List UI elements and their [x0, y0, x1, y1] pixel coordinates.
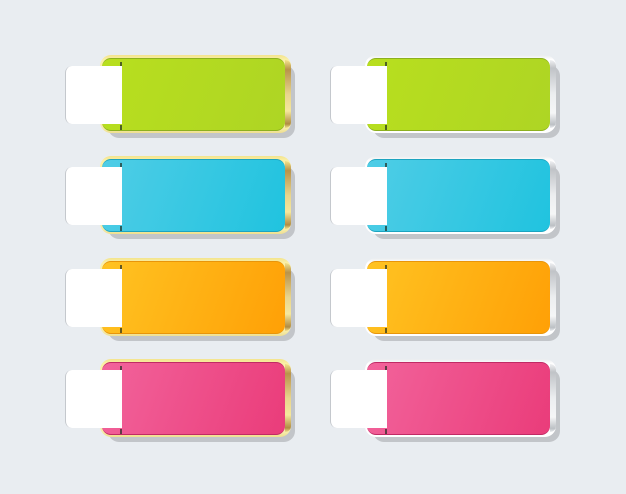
panel: blue label — [367, 159, 550, 232]
card: orange silver-framed, row 3 right — [330, 260, 560, 341]
panel: green label — [367, 58, 550, 130]
card: green silver-framed, row 1 right — [330, 57, 560, 138]
card: orange gold-framed, row 3 left — [65, 258, 295, 341]
white tab — [65, 269, 122, 327]
white tab — [330, 269, 387, 327]
white tab — [65, 66, 122, 124]
white tab — [330, 167, 387, 225]
card: green gold-framed, row 1 left — [65, 55, 295, 138]
panel: pink label — [102, 362, 285, 434]
card: pink silver-framed, row 4 right — [330, 361, 560, 442]
white tab — [330, 370, 387, 428]
card: pink gold-framed, row 4 left — [65, 359, 295, 442]
panel: orange label — [102, 261, 285, 334]
white tab — [65, 167, 122, 225]
card: blue silver-framed, row 2 right — [330, 158, 560, 239]
panel: orange label — [367, 261, 550, 334]
panel: pink label — [367, 362, 550, 434]
card: blue gold-framed, row 2 left — [65, 156, 295, 239]
panel: green label — [102, 58, 285, 130]
white tab — [65, 370, 122, 428]
white tab — [330, 66, 387, 124]
panel: blue label — [102, 159, 285, 232]
